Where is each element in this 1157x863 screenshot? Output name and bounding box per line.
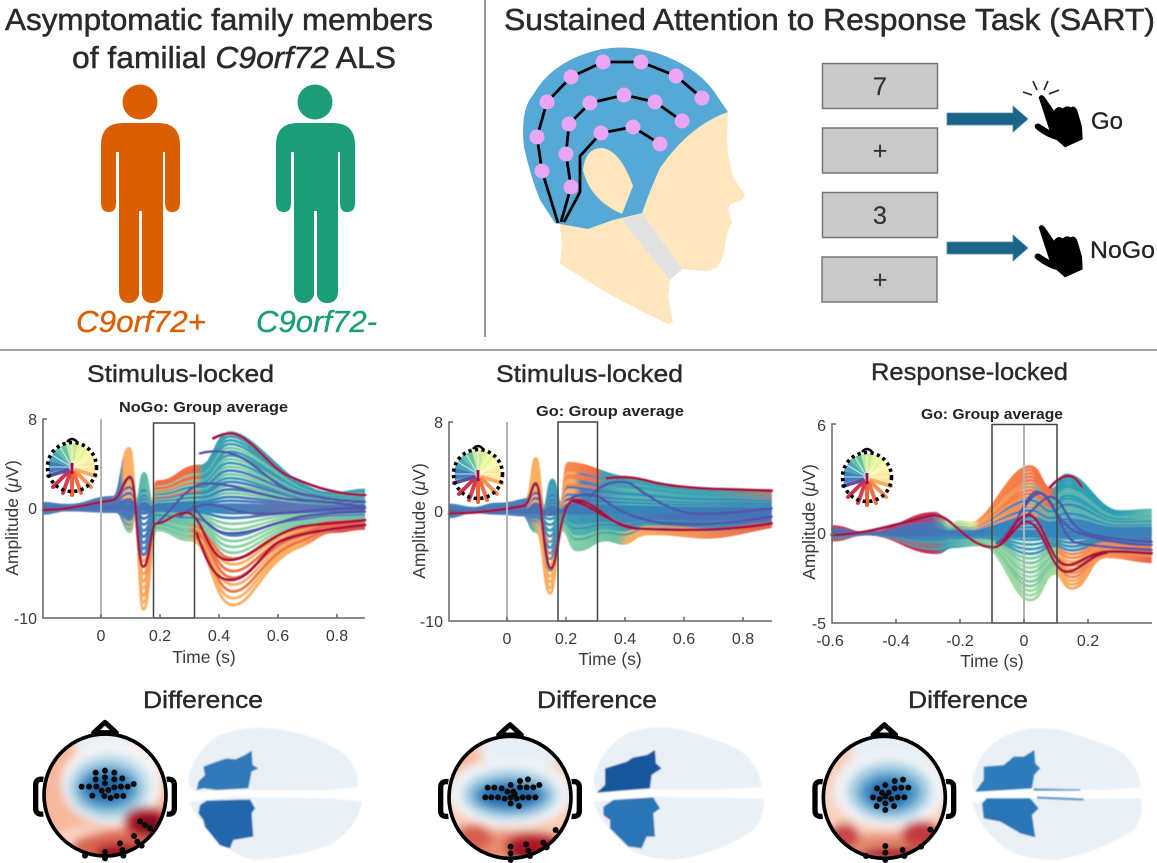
chart: ERP butterfly plot: 0 [503, 631, 512, 648]
chart: ERP butterfly plot [2, 412, 365, 667]
chart: ERP butterfly plot: 0.4 [208, 628, 230, 645]
chart: ERP butterfly plot: 0 [817, 526, 826, 543]
chart: ERP butterfly plot: -10 [14, 611, 37, 628]
chart: ERP butterfly plot: -0.6 [816, 633, 844, 650]
chart: ERP butterfly plot: -10 [420, 614, 443, 631]
icon: withheld hand [1035, 225, 1083, 277]
chart: ERP butterfly plot: 0 [97, 628, 106, 645]
topographic map [32, 718, 178, 863]
chart: ERP butterfly plot: 0.2 [555, 631, 577, 648]
title: asymptomatic family members [5, 2, 433, 75]
chart: ERP butterfly plot: 0.8 [326, 628, 348, 645]
label: Go: Go [1091, 108, 1123, 135]
chart: ERP butterfly plot: 0.4 [614, 631, 636, 648]
title: SART task: Sustained Attention to Response Task (SART) [504, 2, 1155, 37]
chart: ERP butterfly plot: 0.8 [732, 631, 754, 648]
chart: ERP butterfly plot: 8 [28, 412, 37, 429]
heading: Response-locked [871, 359, 1068, 386]
arrow: to Go [947, 106, 1028, 132]
chart: ERP butterfly plot: Time (s) [172, 647, 236, 667]
icon: channel colour key [842, 449, 892, 505]
chart: ERP butterfly plot: Amplitude (μV) [2, 460, 22, 576]
label: NoGo: NoGo [1090, 237, 1155, 264]
subtitle: NoGo: Group average [119, 400, 288, 416]
topographic map [811, 724, 958, 863]
icon: channel colour key [454, 446, 502, 502]
chart: ERP butterfly plot [409, 415, 772, 669]
heading: Stimulus-locked [87, 361, 274, 388]
chart: ERP butterfly plot: -5 [812, 616, 826, 633]
panel: stimulus-locked Go [409, 361, 772, 863]
icon: channel colour key [48, 439, 96, 495]
chart: ERP butterfly plot: 0.2 [149, 628, 171, 645]
brain map [972, 728, 1142, 860]
stimulus box: plus: + [873, 266, 887, 294]
chart: ERP butterfly plot: 0.6 [267, 628, 289, 645]
chart: ERP butterfly plot: Time (s) [960, 651, 1024, 671]
brain map [188, 728, 362, 860]
stimulus box: plus: + [873, 137, 887, 165]
panel: stimulus-locked NoGo [2, 361, 365, 863]
title: asymptomatic family members: of familial C9orf72 ALS [72, 40, 396, 75]
chart: ERP butterfly plot: 0 [28, 501, 37, 518]
chart: ERP butterfly plot: 0.2 [1077, 633, 1099, 650]
stimulus box: 3: 3 [873, 202, 887, 230]
stimulus box: plus [822, 128, 938, 173]
title: asymptomatic family members: Asymptomatic family members [5, 2, 433, 37]
chart: ERP butterfly plot: 8 [434, 415, 443, 432]
topographic map [437, 724, 583, 863]
subtitle: Go: Group average [536, 404, 684, 420]
subtitle: Go: Group average [921, 407, 1063, 423]
chart: ERP butterfly plot: Amplitude (μV) [799, 464, 819, 580]
icon: green person C9orf72 negative [276, 84, 355, 303]
chart: ERP butterfly plot: -0.4 [882, 633, 910, 650]
chart: ERP butterfly plot: Amplitude (μV) [409, 463, 429, 579]
label: C9orf72 negative: C9orf72- [256, 304, 377, 339]
chart: ERP butterfly plot: Time (s) [578, 649, 642, 669]
label: C9orf72 positive: C9orf72+ [76, 304, 206, 339]
stimulus box: 7: 7 [873, 73, 887, 101]
heading: difference: Difference [143, 687, 263, 714]
stimulus box: 3 [822, 192, 938, 238]
chart: ERP butterfly plot: 0 [434, 504, 443, 521]
stimulus box: 7 [822, 64, 938, 108]
icon: pressing hand with rays [1023, 81, 1083, 147]
stimulus box: plus [822, 257, 937, 302]
chart: ERP butterfly plot: 0 [1020, 633, 1029, 650]
illustration: head with EEG cap [523, 48, 745, 324]
heading: difference: Difference [537, 687, 657, 714]
chart: ERP butterfly plot: 0.6 [673, 631, 695, 648]
arrow: to NoGo [947, 235, 1028, 261]
icon: orange person C9orf72 positive [101, 84, 180, 303]
chart: ERP butterfly plot [799, 418, 1152, 671]
heading: difference: Difference [908, 687, 1028, 714]
chart: ERP butterfly plot: 6 [817, 418, 826, 435]
panel: response-locked Go [799, 359, 1152, 863]
brain map [593, 727, 764, 860]
chart: ERP butterfly plot: -0.2 [946, 633, 974, 650]
heading: Stimulus-locked [496, 361, 683, 388]
